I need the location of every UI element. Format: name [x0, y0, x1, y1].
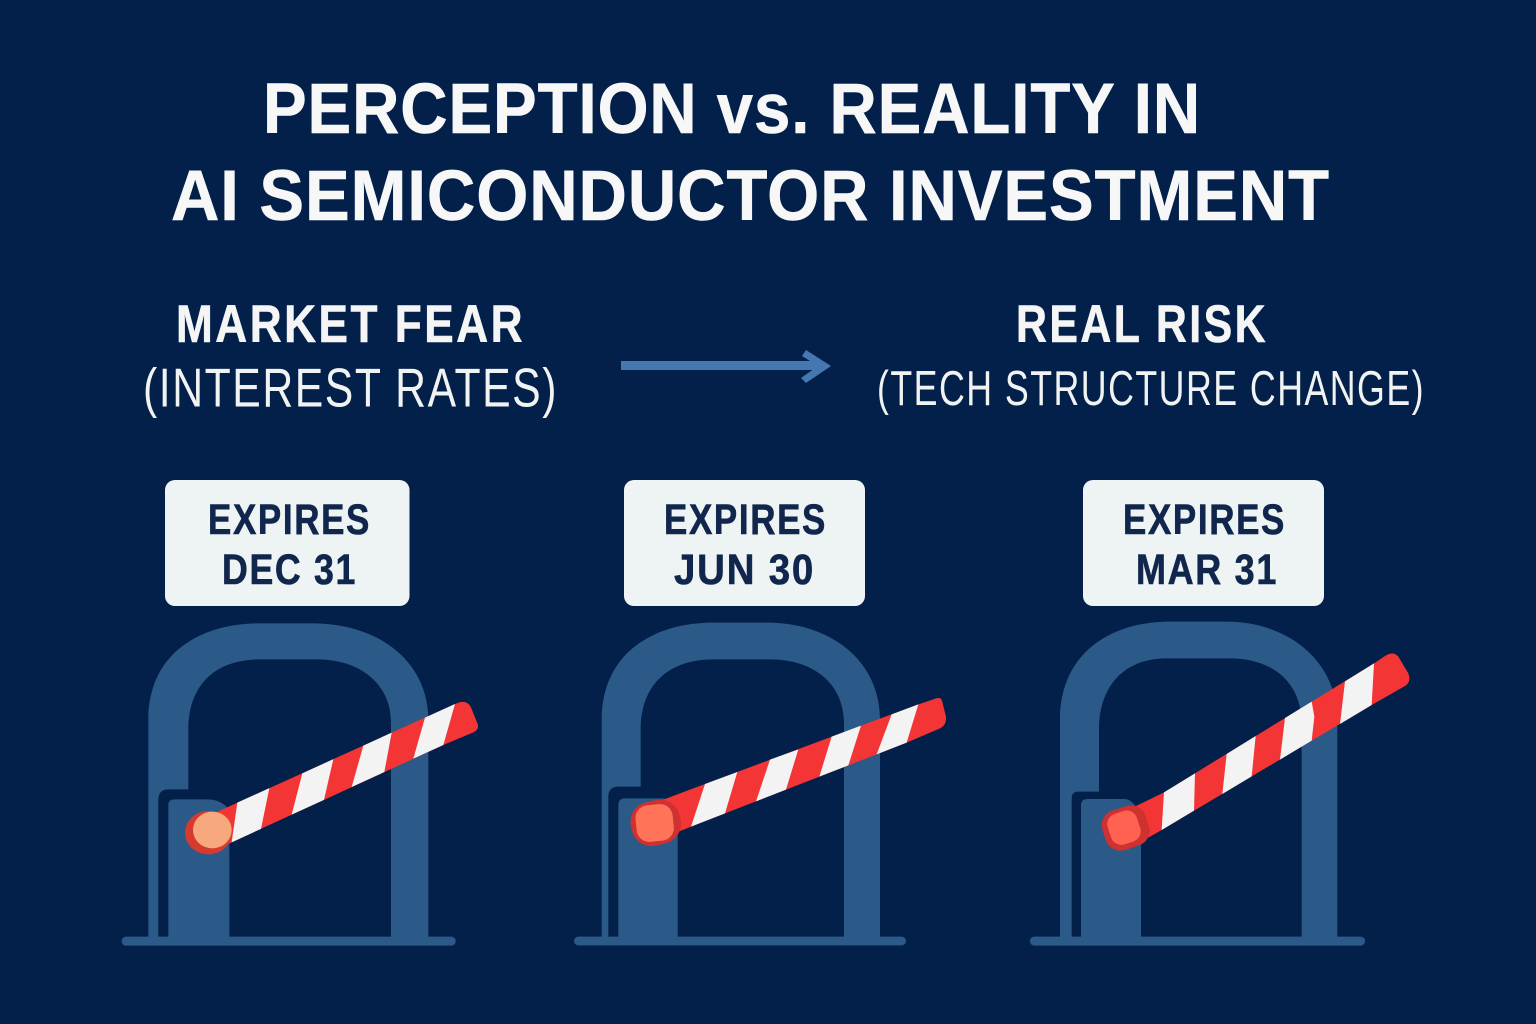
pivot light [1098, 801, 1154, 855]
card: expires jun 30 [624, 480, 865, 606]
card: expires mar 31: MAR 31 [1136, 546, 1278, 594]
heading: real risk [877, 295, 1425, 416]
title: PERCEPTION vs. REALITY IN [263, 70, 1201, 149]
arrow: market fear to real risk [621, 350, 831, 383]
heading: real risk: REAL RISK [1016, 295, 1268, 354]
card: expires jun 30: JUN 30 [674, 546, 815, 594]
card: expires dec 31: EXPIRES [208, 496, 371, 544]
gate arch [602, 623, 880, 938]
gate post [168, 799, 229, 938]
card: expires dec 31: DEC 31 [222, 546, 357, 594]
card: expires dec 31 [165, 480, 410, 606]
gate arch [148, 623, 428, 938]
barrier gate 3 [1030, 622, 1409, 946]
card: expires mar 31 [1083, 480, 1324, 606]
title: AI SEMICONDUCTOR INVESTMENT [171, 157, 1330, 236]
card: expires mar 31: EXPIRES [1123, 496, 1286, 544]
barrier gate 2 [574, 623, 946, 945]
heading: market fear [143, 295, 558, 418]
gate arch [1060, 622, 1337, 938]
boom arm [647, 698, 946, 843]
boom arm [1120, 653, 1409, 850]
gate base [1030, 937, 1365, 946]
heading: market fear: MARKET FEAR [176, 295, 525, 354]
heading: market fear: (INTEREST RATES) [143, 356, 558, 418]
gate post [1081, 799, 1141, 938]
gate base [122, 937, 456, 946]
gate base [574, 937, 906, 945]
pivot light [185, 811, 232, 854]
barrier gate 1 [122, 623, 478, 946]
boom arm [200, 702, 478, 853]
pivot light [626, 795, 685, 850]
title [171, 70, 1330, 236]
gate post [618, 798, 678, 938]
card: expires jun 30: EXPIRES [664, 496, 827, 544]
